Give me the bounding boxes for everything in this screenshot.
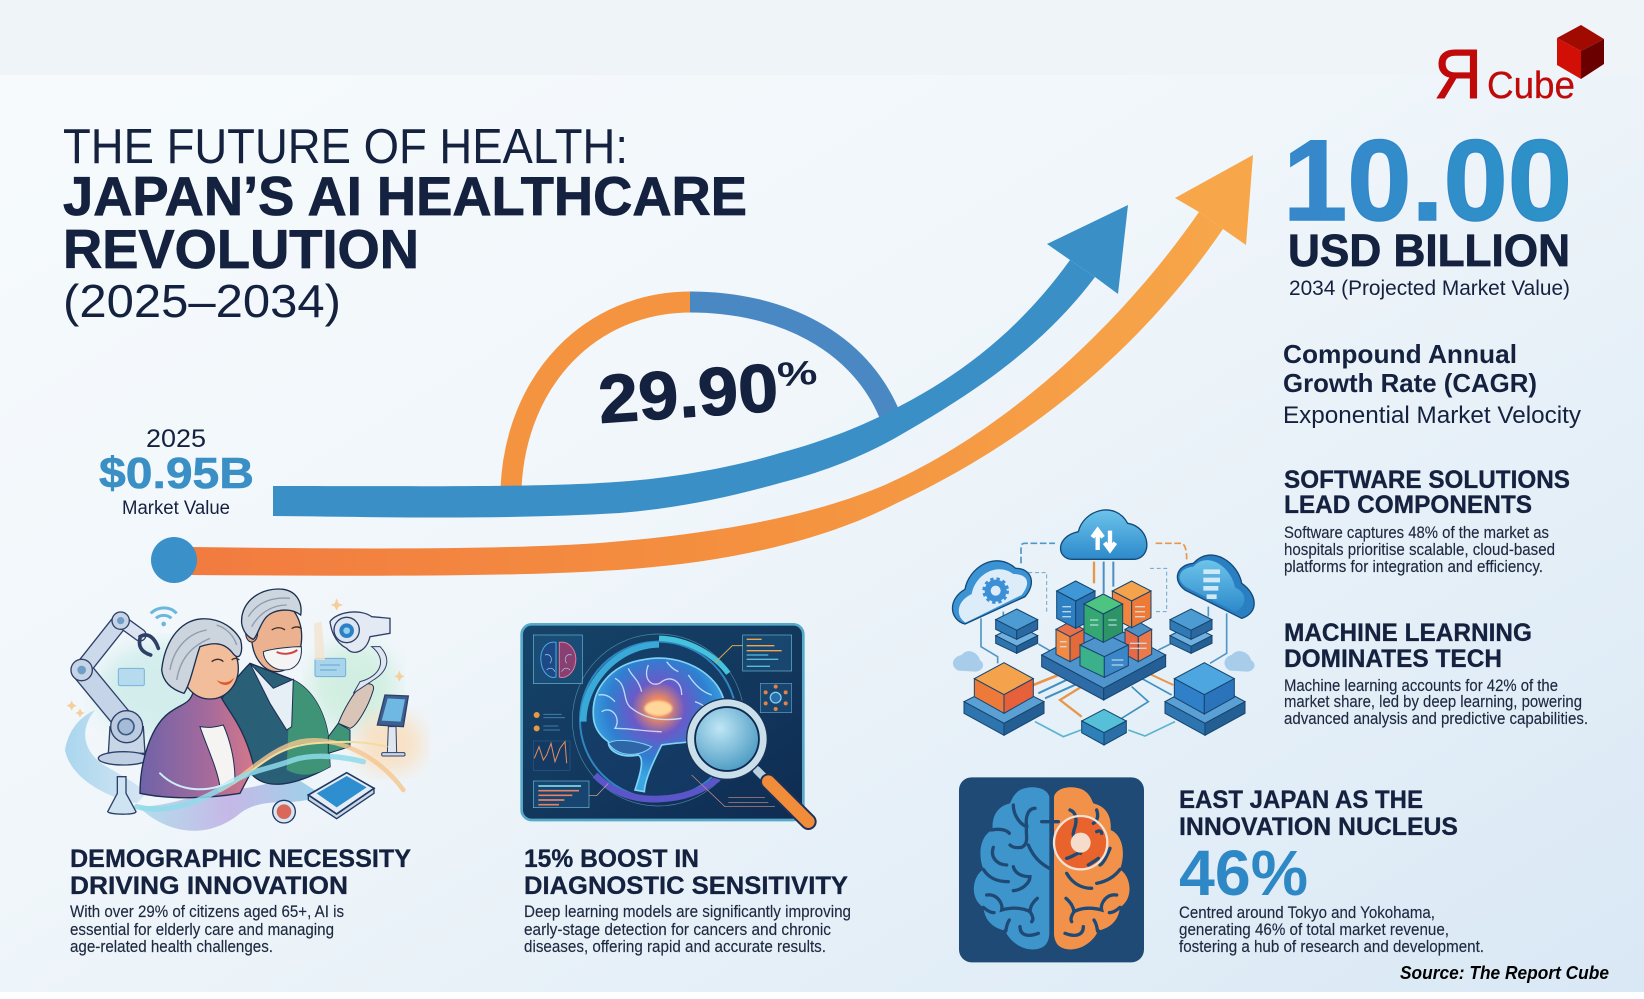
small circle bbox=[273, 800, 295, 823]
brain bbox=[593, 658, 725, 792]
2034 projected value: USD BILLION bbox=[1288, 225, 1570, 276]
2025 market value: $0.95B bbox=[99, 449, 254, 498]
2025 market value: 2025 bbox=[146, 425, 206, 453]
source: Source: The Report Cube bbox=[1400, 963, 1609, 983]
diagnostic text: diseases, offering rapid and accurate results. bbox=[524, 937, 826, 956]
mid left server bbox=[996, 609, 1038, 653]
logo: RCube: Cube bbox=[1487, 65, 1575, 107]
magnifier bbox=[757, 770, 768, 782]
bottom right server with blue box bbox=[1165, 663, 1245, 735]
software solutions text: Software captures 48% of the market as bbox=[1284, 523, 1549, 542]
diagnostic text bbox=[524, 845, 851, 956]
software solutions text: hospitals prioritise scalable, cloud-based bbox=[1284, 540, 1555, 559]
waves bbox=[137, 740, 403, 809]
bottom left server with orange box bbox=[964, 663, 1044, 735]
2034 projected value: 2034 (Projected Market Value) bbox=[1289, 277, 1570, 300]
start dot bbox=[151, 537, 197, 583]
title: JAPAN’S AI HEALTHCARE bbox=[63, 165, 747, 227]
CAGR description bbox=[1283, 339, 1581, 429]
title bbox=[63, 120, 747, 327]
illustration: diagnostic screen with brain and magnifier bbox=[522, 624, 808, 822]
logo: RCube: Я bbox=[1434, 35, 1482, 113]
illustration: elderly couple with robot arm bbox=[65, 589, 423, 831]
CAGR value: % bbox=[776, 354, 818, 395]
right cloud bbox=[1177, 555, 1254, 618]
east japan text: 46% bbox=[1179, 837, 1308, 909]
kiosk bbox=[377, 695, 408, 727]
central platform bbox=[1042, 581, 1166, 700]
machine learning text bbox=[1284, 619, 1588, 728]
demographic text: With over 29% of citizens aged 65+, AI is bbox=[70, 902, 344, 921]
demographic text: DRIVING INNOVATION bbox=[70, 872, 348, 900]
title: (2025–2034) bbox=[63, 275, 341, 327]
machine learning text: advanced analysis and predictive capabilities. bbox=[1284, 709, 1588, 728]
east japan text: Centred around Tokyo and Yokohama, bbox=[1179, 903, 1435, 922]
logo: RCube bbox=[1434, 25, 1604, 113]
illustration: cloud and server network bbox=[952, 510, 1255, 745]
CAGR description: Exponential Market Velocity bbox=[1283, 402, 1581, 429]
CAGR arc gauge bbox=[511, 302, 891, 488]
2025 market value: Market Value bbox=[122, 498, 230, 519]
tablet bbox=[308, 788, 374, 819]
woman bbox=[140, 692, 254, 798]
machine learning text: market share, led by deep learning, powering bbox=[1284, 692, 1582, 711]
title: REVOLUTION bbox=[63, 218, 419, 280]
diagnostic text: 15% BOOST IN bbox=[524, 845, 699, 873]
software solutions text: LEAD COMPONENTS bbox=[1284, 491, 1532, 519]
left cloud bbox=[952, 561, 1031, 624]
diagnostic text: Deep learning models are significantly improving bbox=[524, 902, 851, 921]
2025 market value bbox=[99, 425, 254, 519]
bottom small box bbox=[1082, 709, 1126, 745]
title: THE FUTURE OF HEALTH: bbox=[63, 120, 628, 174]
demographic text: DEMOGRAPHIC NECESSITY bbox=[70, 845, 411, 873]
mid right server bbox=[1170, 609, 1212, 653]
east japan text bbox=[1179, 786, 1484, 956]
east japan text: generating 46% of total market revenue, bbox=[1179, 920, 1449, 939]
demographic text: age-related health challenges. bbox=[70, 937, 273, 956]
software solutions text bbox=[1284, 466, 1570, 576]
connector lines bbox=[981, 543, 1227, 737]
man bbox=[217, 663, 330, 784]
camera bbox=[353, 647, 387, 693]
small clouds bbox=[953, 651, 983, 672]
CAGR description: Compound Annual bbox=[1283, 339, 1517, 369]
flask bbox=[108, 777, 136, 814]
diagnostic text: DIAGNOSTIC SENSITIVITY bbox=[524, 872, 848, 900]
arrow: orange growth curve bbox=[190, 155, 1253, 576]
demographic text bbox=[70, 845, 411, 956]
east japan text: fostering a hub of research and development. bbox=[1179, 937, 1484, 956]
machine learning text: DOMINATES TECH bbox=[1284, 645, 1502, 673]
east japan text: EAST JAPAN AS THE bbox=[1179, 786, 1423, 814]
CAGR value: 29.90 bbox=[596, 350, 781, 438]
machine learning text: MACHINE LEARNING bbox=[1284, 619, 1532, 647]
icon: brain hotspot panel bbox=[959, 777, 1144, 962]
arrow: blue growth curve bbox=[273, 205, 1128, 518]
east japan text: INNOVATION NUCLEUS bbox=[1179, 813, 1458, 841]
software solutions text: platforms for integration and efficiency. bbox=[1284, 557, 1543, 576]
software solutions text: SOFTWARE SOLUTIONS bbox=[1284, 466, 1570, 494]
demographic text: essential for elderly care and managing bbox=[70, 920, 334, 939]
top cloud bbox=[1061, 510, 1147, 559]
machine learning text: Machine learning accounts for 42% of the bbox=[1284, 676, 1558, 695]
diagnostic text: early-stage detection for cancers and chronic bbox=[524, 920, 831, 939]
2034 projected value bbox=[1283, 117, 1572, 300]
2034 projected value: 10.00 bbox=[1283, 117, 1572, 245]
CAGR description: Growth Rate (CAGR) bbox=[1283, 368, 1537, 398]
panels bbox=[533, 635, 582, 684]
